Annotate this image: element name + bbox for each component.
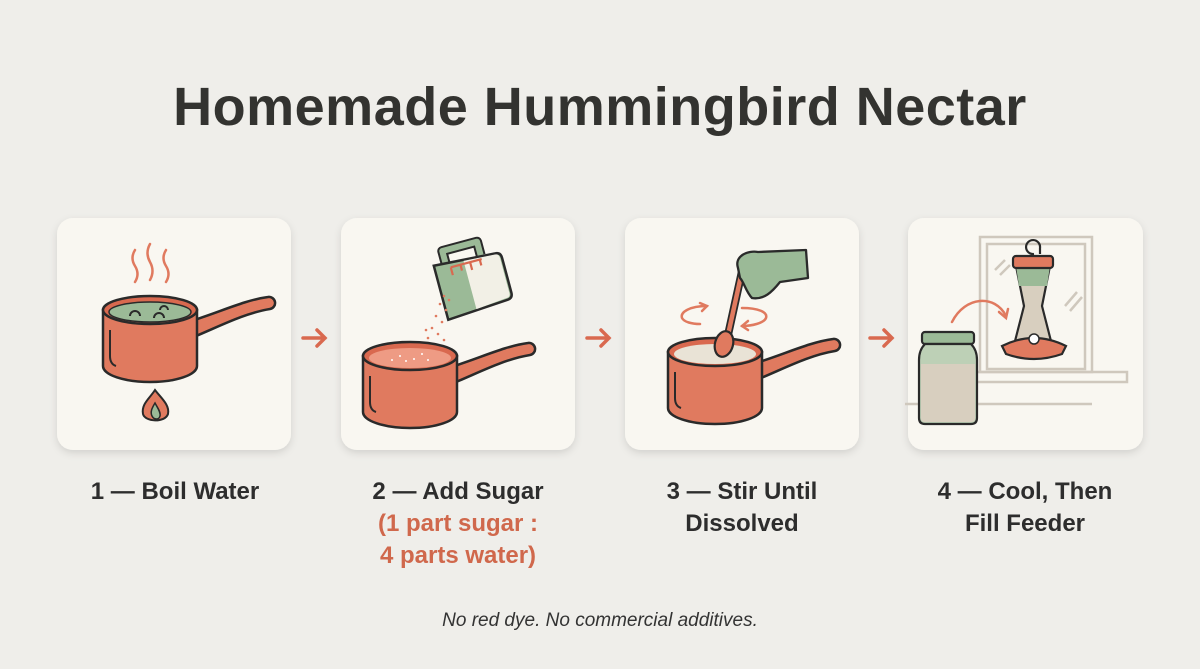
panel 2: add sugar (341, 218, 575, 450)
label 4: 4 — Cool, Then (938, 478, 1112, 505)
label 2: (1 part sugar : (378, 510, 538, 537)
icon: pan with boiling water (103, 296, 275, 382)
icon: spoon (728, 262, 744, 335)
panel 3: stir (625, 218, 859, 450)
label 3: 3 — Stir Until (667, 478, 817, 505)
label 4 (938, 478, 1112, 537)
label 1: 1 — Boil Water (91, 478, 259, 505)
icon: swirl arrows (682, 303, 766, 330)
arrow 1 (303, 330, 325, 346)
icon: pan with water (668, 338, 840, 424)
icon: steam (132, 244, 168, 282)
icon: feeder (1026, 240, 1040, 254)
icon: sugar stream (425, 295, 450, 345)
label 4: Fill Feeder (965, 510, 1085, 537)
label 3: Dissolved (685, 510, 799, 537)
icon: pan with sugar (363, 342, 535, 428)
footer note: No red dye. No commercial additives. (442, 610, 758, 631)
panel 4: cool and fill (905, 218, 1143, 450)
panel 1: boil water (57, 218, 291, 450)
arrow 2 (587, 330, 609, 346)
label 2: 4 parts water) (380, 542, 536, 569)
window frame (905, 237, 1127, 404)
title: Homemade Hummingbird Nectar (173, 77, 1027, 137)
icon: hand (737, 250, 808, 298)
label 2 (372, 478, 544, 569)
label 3 (667, 478, 817, 537)
arrow 3 (870, 330, 892, 346)
icon: flame (143, 390, 168, 420)
icon: measuring cup (431, 237, 514, 320)
label 2: 2 — Add Sugar (372, 478, 544, 505)
icon: jar (922, 332, 974, 344)
icon: curved arrow (952, 301, 1006, 322)
